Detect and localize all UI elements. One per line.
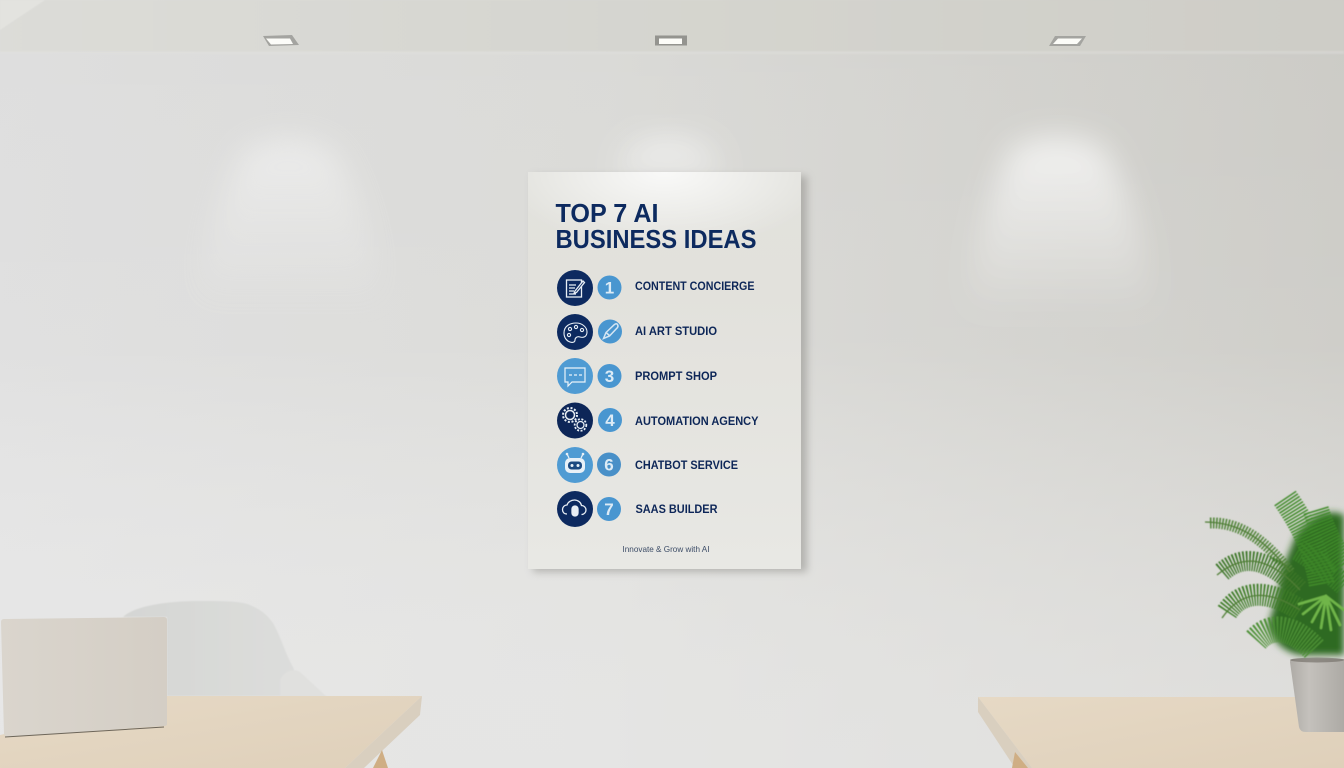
plant pot	[1290, 658, 1344, 732]
laptop	[1, 617, 167, 737]
item 4: automation agency: AUTOMATION AGENCY	[635, 414, 758, 428]
bright central fan	[1299, 596, 1344, 630]
dark foliage mass	[1268, 512, 1344, 655]
item 5: chatbot service: CHATBOT SERVICE	[635, 458, 738, 472]
item 1: content concierge	[557, 270, 754, 306]
poster shadow	[533, 176, 807, 572]
icon: robot	[565, 453, 585, 473]
ceiling spotlight right	[1049, 36, 1086, 46]
item 3: prompt shop: PROMPT SHOP	[635, 369, 717, 383]
footer tagline: Innovate & Grow with AI	[622, 544, 710, 554]
poster contents	[556, 198, 758, 554]
item 1: content concierge: 1	[605, 278, 614, 298]
item 5: chatbot service	[557, 447, 738, 483]
item 3: prompt shop	[557, 358, 717, 394]
item 6: SaaS builder: SAAS BUILDER	[636, 502, 718, 516]
feathered fronds built from dashed strokes	[1210, 498, 1344, 650]
ceiling spotlight left	[263, 35, 299, 46]
item 6: SaaS builder	[557, 491, 718, 527]
item 1: content concierge: CONTENT CONCIERGE	[635, 279, 754, 293]
item 5: chatbot service: 6	[604, 456, 614, 474]
icon: palette	[564, 323, 587, 342]
potted plant	[1205, 498, 1344, 732]
icon: document and pen	[566, 280, 584, 297]
ceiling spotlight centre	[655, 36, 687, 46]
item 4: automation agency	[557, 402, 758, 438]
item 2: AI art studio: AI ART STUDIO	[635, 324, 717, 338]
title: BUSINESS IDEAS	[556, 224, 756, 254]
plant fronds	[1205, 498, 1344, 655]
frond midribs	[1205, 522, 1300, 618]
item 4: automation agency: 4	[605, 411, 615, 430]
left desk	[0, 696, 422, 768]
poster	[528, 172, 801, 569]
chair	[123, 601, 327, 697]
icon: paintbrush	[604, 324, 618, 338]
right desk	[978, 697, 1344, 768]
title: TOP 7 AI	[556, 198, 658, 228]
item 2: AI art studio	[557, 314, 717, 350]
icon: cloud with hand	[562, 500, 586, 516]
icon: speech bubble	[565, 368, 585, 386]
title	[556, 198, 756, 254]
wall light pools	[195, 137, 1155, 350]
item 3: prompt shop: 3	[605, 367, 614, 386]
item 6: SaaS builder: 7	[604, 500, 614, 519]
ceiling	[0, 0, 1344, 54]
icon: gears	[563, 408, 586, 431]
